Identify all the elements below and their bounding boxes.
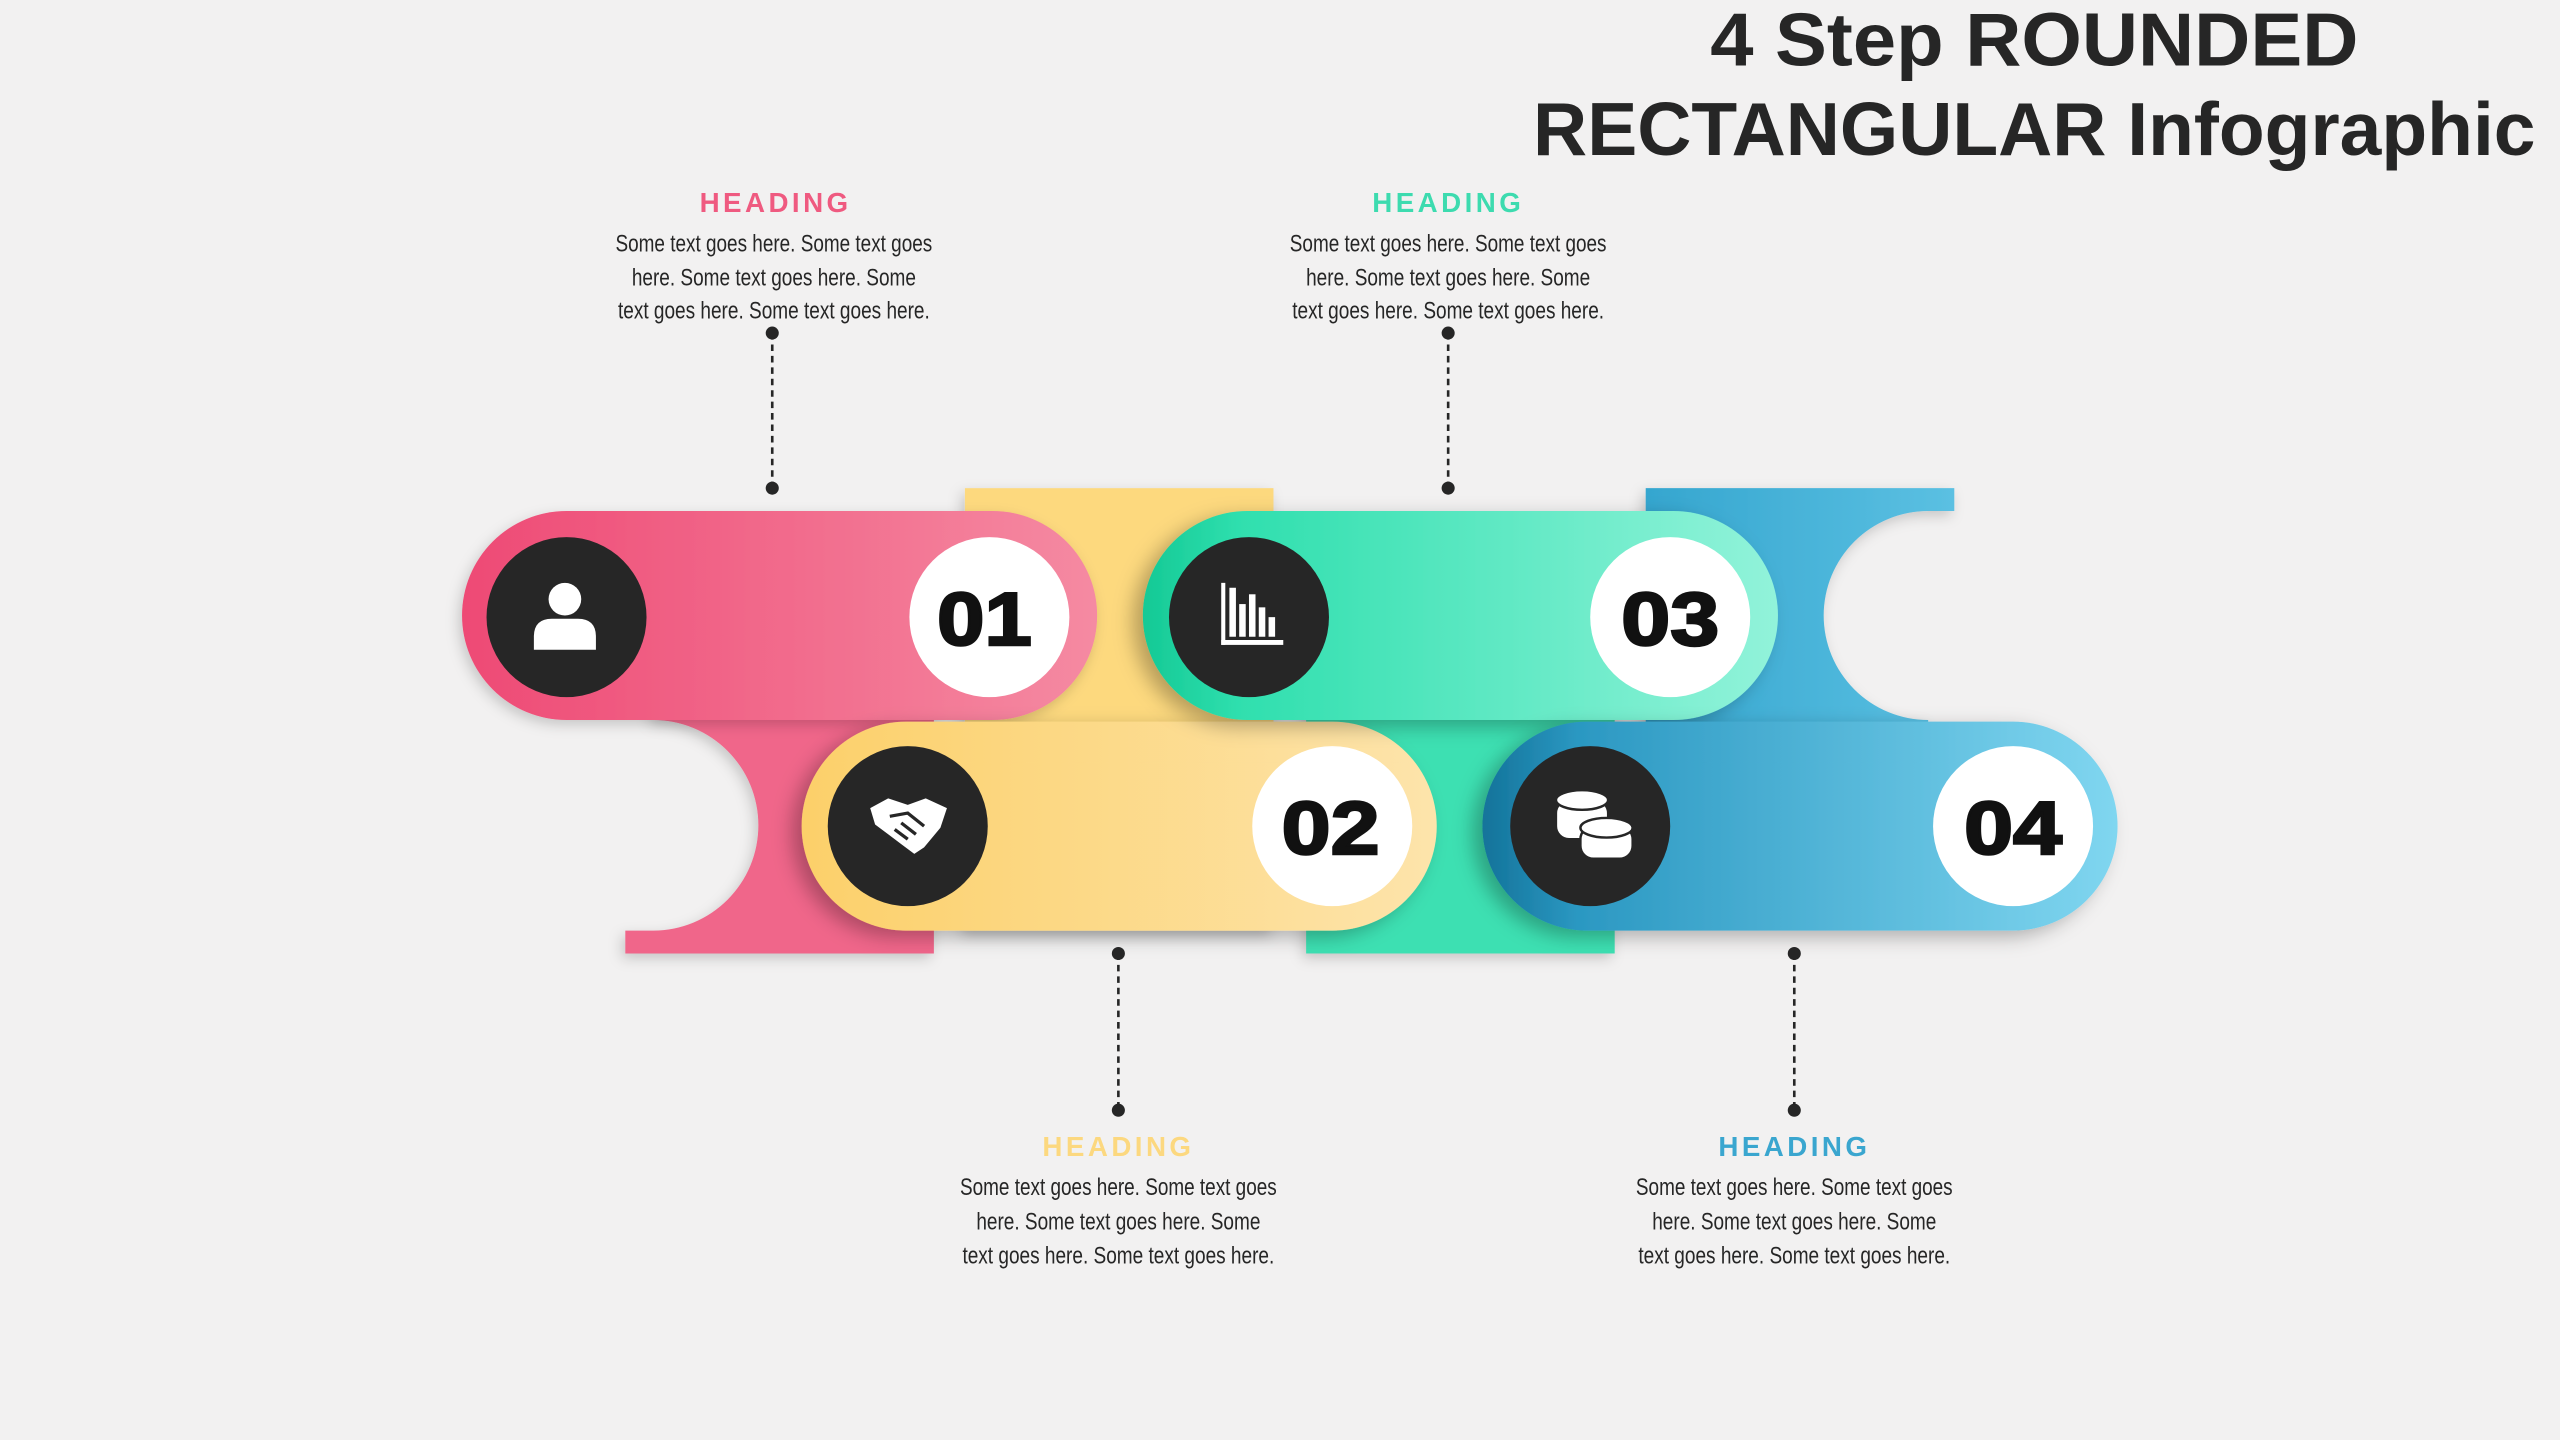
title: RECTANGULAR Infographic [1533,87,2536,171]
text block 2: text goes here. Some text goes here. [962,1243,1274,1270]
text block 3 [1290,187,1607,324]
yellow stem [965,488,1273,931]
text block 1: Some text goes here. Some text goes [616,230,932,257]
text block 2: HEADING [1042,1131,1191,1162]
text block 3: text goes here. Some text goes here. [1292,297,1604,324]
connector 4 [1788,947,1801,1117]
text block 1: text goes here. Some text goes here. [618,297,930,324]
blue stem [1646,488,1954,767]
icon: person [487,537,647,697]
number 03: 03 [1621,577,1719,661]
number 03 [1590,537,1750,697]
text block 4: HEADING [1718,1131,1867,1162]
text block 2: here. Some text goes here. Some [976,1208,1260,1235]
icon: coins [1510,746,1670,906]
text block 1: HEADING [700,187,848,218]
text block 4: here. Some text goes here. Some [1652,1208,1936,1235]
number 04 [1933,746,2093,906]
step 2 pill [802,722,1437,931]
text block 3: HEADING [1372,187,1521,218]
step 3 pill [1143,511,1778,720]
text block 4 [1636,1131,1953,1270]
step 4 pill [1482,722,2118,931]
text block 1 [616,187,932,324]
icon: handshake [828,746,988,906]
text block 2 [960,1131,1277,1270]
text block 3: here. Some text goes here. Some [1306,265,1590,292]
text block 4: text goes here. Some text goes here. [1638,1243,1950,1270]
step 1 pill [462,511,1097,720]
connector 3 [1442,327,1455,495]
text block 2: Some text goes here. Some text goes [960,1174,1277,1201]
number 02: 02 [1282,786,1380,870]
number 04: 04 [1964,786,2062,870]
connector 1 [766,327,779,495]
icon: bar chart [1169,537,1329,697]
title [1533,0,2536,171]
number 01: 01 [937,577,1032,661]
green stem [1306,653,1615,953]
connector 2 [1112,947,1125,1117]
text block 3: Some text goes here. Some text goes [1290,230,1607,257]
number 01 [909,537,1069,697]
text block 4: Some text goes here. Some text goes [1636,1174,1953,1201]
text block 1: here. Some text goes here. Some [632,265,916,292]
pink stem [625,702,934,953]
number 02 [1252,746,1412,906]
